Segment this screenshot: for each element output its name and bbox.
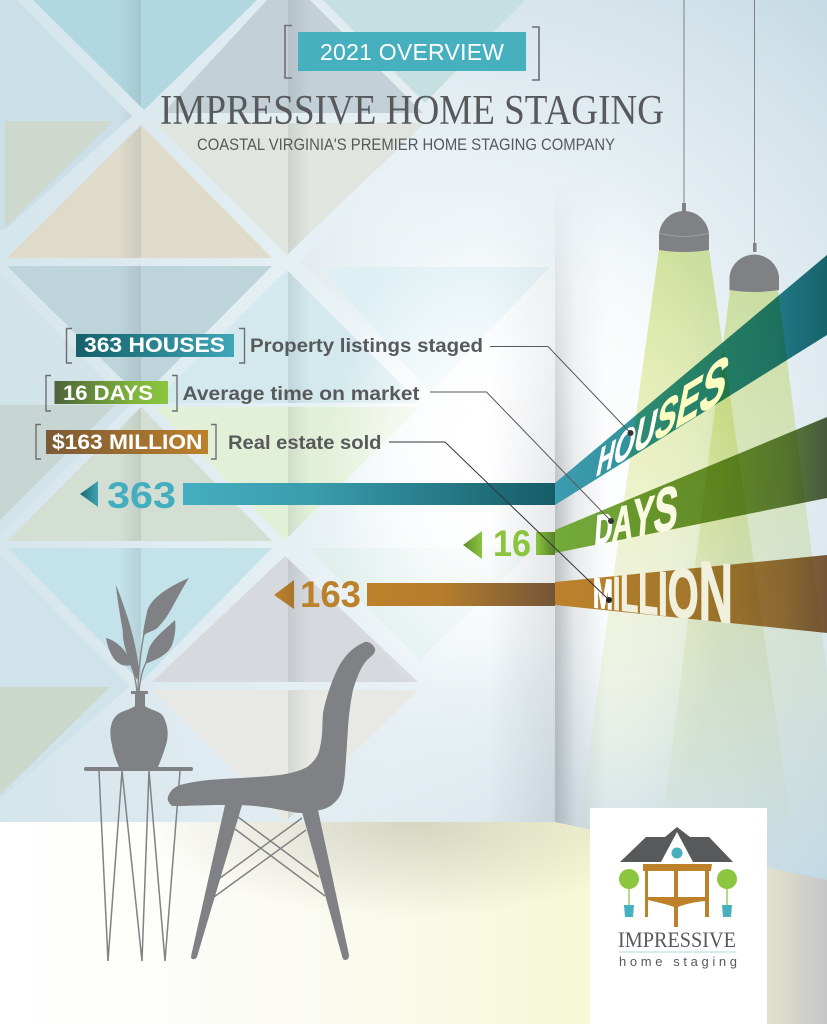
ribbon: days (555, 417, 827, 553)
floor (0, 822, 827, 1024)
logo panel (590, 808, 767, 1024)
logo left topiary (619, 869, 639, 917)
subtitle: COASTAL VIRGINIA'S PREMIER HOME STAGING COMPANY (197, 135, 615, 154)
leader line: million (389, 442, 612, 603)
word: HOUSES: HOUSES (592, 339, 735, 492)
stat label: houses: 363 HOUSES (84, 334, 225, 357)
bar: 363 houses: 363 (107, 475, 176, 516)
bar: 363 houses (80, 475, 555, 516)
word: DAYS: DAYS (593, 472, 680, 558)
stat label: days: 16 DAYS (63, 382, 153, 405)
bar: 163 million (274, 574, 555, 615)
chair (168, 642, 375, 960)
geometric triangle pattern (0, 0, 550, 822)
logo wordmark: IMPRESSIVE (618, 927, 736, 952)
stat label: million: $163 MILLION (52, 431, 202, 454)
leader line: houses (490, 346, 634, 436)
bracket right (532, 27, 539, 80)
leader line: days (430, 392, 614, 524)
lamp: back (730, 0, 779, 292)
bar: 16 days: 16 (493, 523, 531, 564)
bracket left (285, 26, 292, 78)
logo roof (620, 827, 733, 862)
badge text: 2021 OVERVIEW (320, 39, 504, 65)
wall corner shadow (512, 224, 593, 829)
logo tagline: home staging (619, 954, 737, 969)
stat label: houses (66, 328, 483, 363)
header badge (285, 26, 539, 80)
stat label: million: Real estate sold (228, 433, 382, 454)
side table (84, 767, 193, 961)
light beam: back lamp (637, 290, 827, 1024)
right wall glow (505, 170, 735, 830)
word: MILLION: MILLION (593, 532, 733, 641)
plant and vase (106, 578, 189, 767)
bar: 163 million: 163 (300, 574, 361, 615)
stat label: days (46, 376, 420, 411)
light beam: front lamp (551, 250, 820, 1024)
bar: 16 days (463, 523, 555, 564)
title: IMPRESSIVE HOME STAGING (160, 88, 664, 134)
logo table (643, 864, 712, 927)
badge box (298, 32, 526, 71)
stat label: houses: Property listings staged (250, 336, 483, 357)
stat label: days: Average time on market (182, 384, 420, 405)
ribbon: million (555, 555, 827, 633)
logo right topiary (717, 869, 737, 917)
central white glow (325, 230, 625, 710)
stat label: million (36, 424, 382, 459)
lamp: front (659, 0, 709, 252)
ribbon: houses (555, 255, 827, 505)
